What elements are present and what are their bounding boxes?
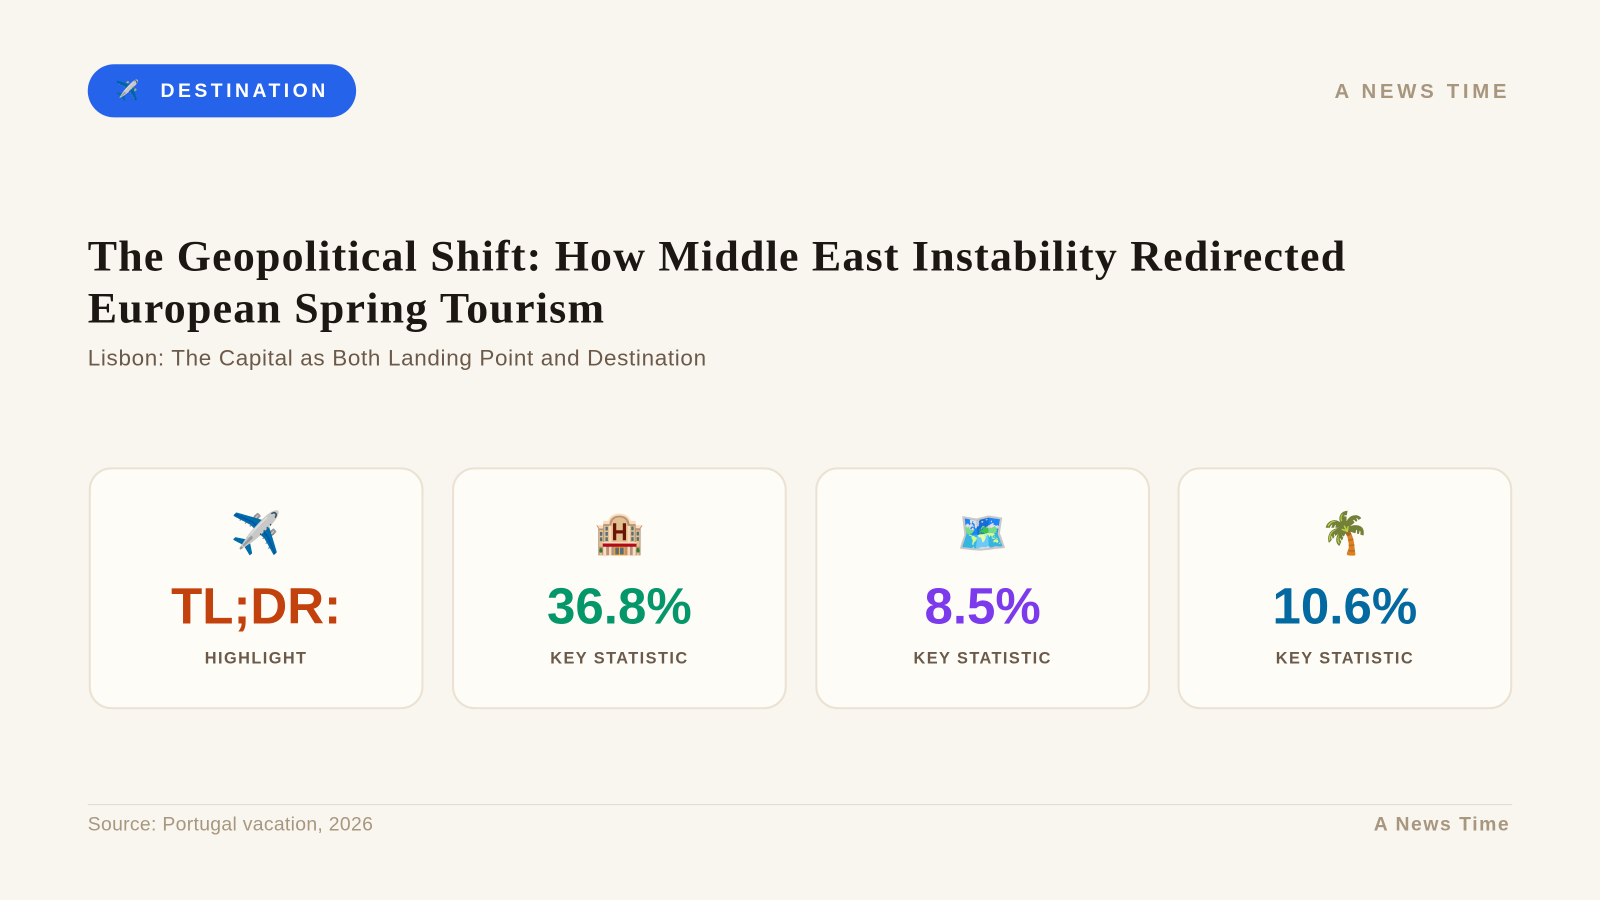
- footer brand: A News Time: [1374, 814, 1510, 836]
- icon: map: 🗺️: [957, 511, 1008, 556]
- label: KEY STATISTIC: [1276, 650, 1414, 667]
- label: KEY STATISTIC: [550, 650, 689, 667]
- icon: hotel: 🏨: [594, 511, 645, 556]
- card: highlight: [89, 467, 423, 709]
- icon: plane: ✈️: [231, 511, 282, 556]
- value: 36.8%: [547, 578, 692, 635]
- tag pill: [88, 64, 356, 117]
- subtitle: Lisbon: The Capital as Both Landing Point and Destination: [88, 345, 707, 370]
- label: KEY STATISTIC: [913, 650, 1052, 667]
- tag pill: ✈️ DESTINATION: [115, 81, 329, 102]
- brand: A NEWS TIME: [1334, 81, 1510, 103]
- title: The Geopolitical Shift: How Middle East Instability Redirected European Spring Tourism: [88, 233, 1346, 333]
- icon: palm: 🌴: [1319, 511, 1370, 556]
- source: Source: Portugal vacation, 2026: [88, 814, 373, 836]
- label: HIGHLIGHT: [205, 650, 307, 667]
- value: 8.5%: [925, 578, 1041, 635]
- card: stat 2: [815, 467, 1150, 709]
- card: stat 3: [1178, 467, 1512, 709]
- card: stat 1: [452, 467, 787, 709]
- value: 10.6%: [1273, 578, 1417, 635]
- value: TL;DR:: [171, 578, 341, 635]
